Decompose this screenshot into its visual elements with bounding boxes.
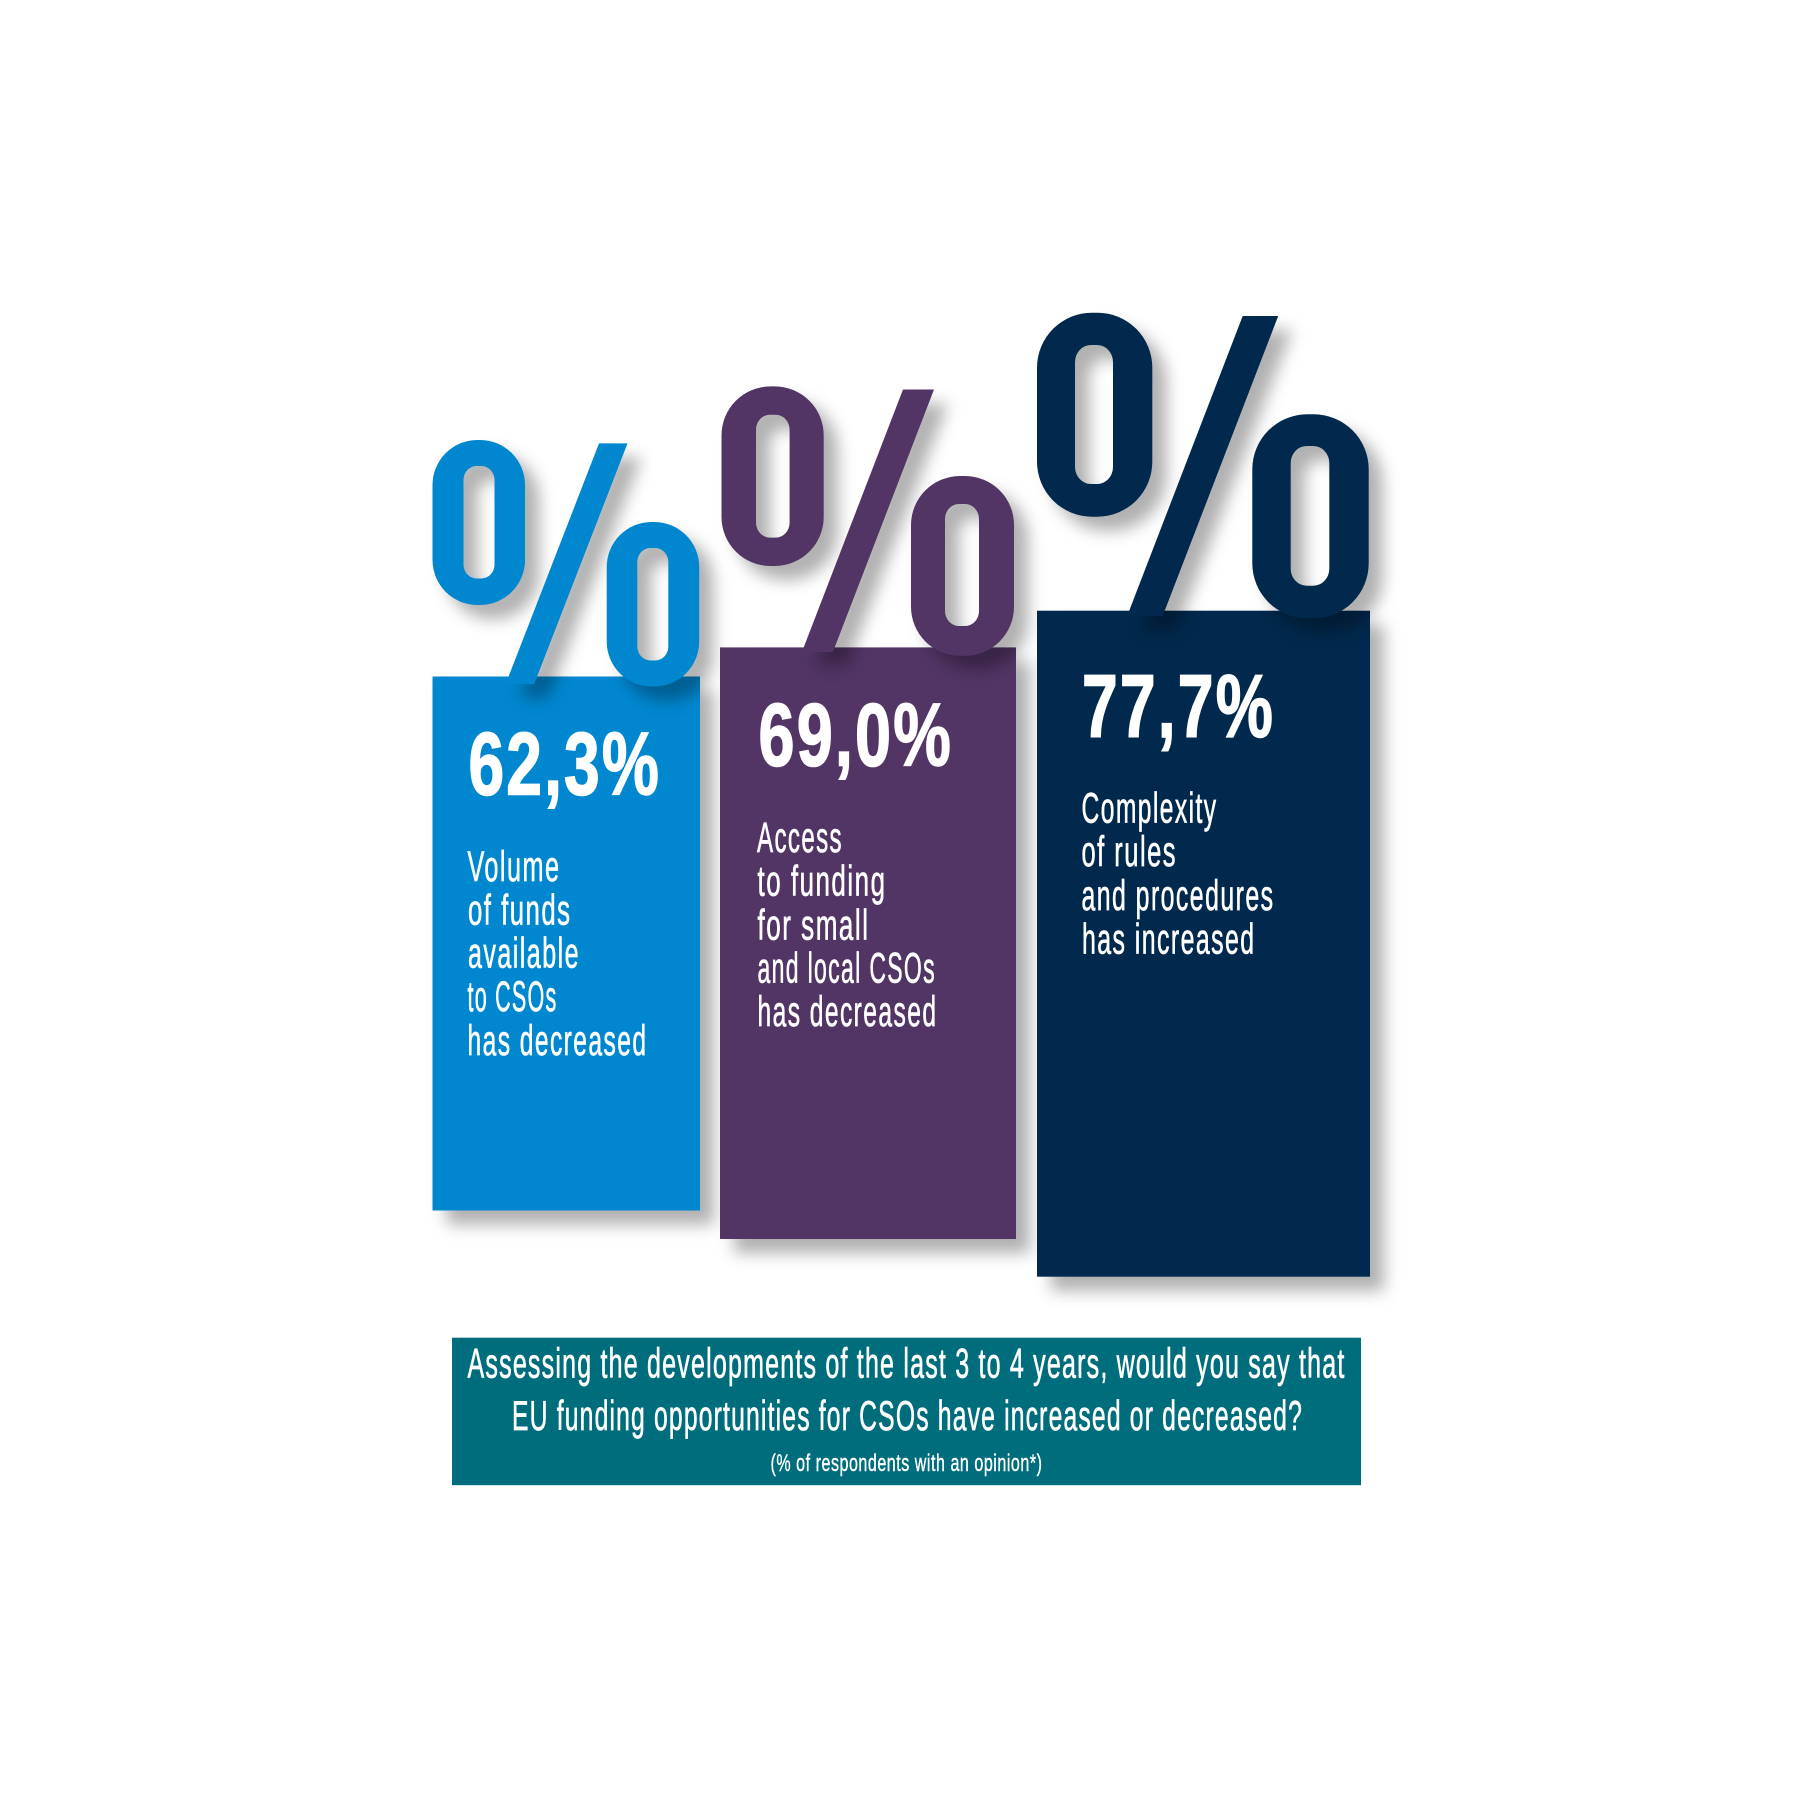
- navy bar: [1037, 611, 1370, 1277]
- description: volume of funds: available: [468, 930, 580, 978]
- panel: survey question: [452, 1338, 1361, 1485]
- description: volume of funds: has decreased: [468, 1017, 648, 1065]
- description: access to funding: to funding: [758, 857, 886, 905]
- infographic canvas: [432, 312, 1394, 1486]
- description: volume of funds: [468, 843, 648, 1065]
- description: access to funding: Access: [757, 814, 843, 862]
- panel: complexity of rules: [1037, 313, 1370, 1277]
- description: access to funding: and local CSOs: [758, 945, 936, 993]
- description: access to funding: has decreased: [758, 988, 938, 1036]
- description: volume of funds: Volume: [468, 843, 560, 891]
- icon: blue percent sign: [432, 440, 699, 686]
- description: complexity of rules: and procedures: [1082, 872, 1274, 920]
- description: complexity of rules: has increased: [1082, 915, 1256, 963]
- panel: volume of funds: [432, 440, 700, 1210]
- value: 62,3%: 62,3%: [468, 714, 661, 814]
- icon: navy percent sign: [1037, 313, 1369, 618]
- panel: access to funding: [720, 386, 1016, 1239]
- description: complexity of rules: [1082, 785, 1274, 963]
- question note: (% of respondents with an opinion*): [770, 1450, 1042, 1477]
- description: access to funding: [757, 814, 938, 1036]
- description: volume of funds: to CSOs: [468, 973, 558, 1021]
- icon: purple percent sign: [722, 386, 1014, 656]
- value: 77,7%: 77,7%: [1082, 656, 1275, 756]
- description: volume of funds: of funds: [468, 886, 572, 934]
- question text: [468, 1340, 1346, 1439]
- blue bar: [432, 676, 700, 1210]
- description: complexity of rules: of rules: [1082, 828, 1177, 876]
- purple bar: [720, 647, 1016, 1239]
- description: access to funding: for small: [758, 901, 870, 949]
- value: 69,0%: 69,0%: [758, 684, 953, 784]
- teal banner: [452, 1338, 1361, 1485]
- description: complexity of rules: Complexity: [1082, 785, 1218, 833]
